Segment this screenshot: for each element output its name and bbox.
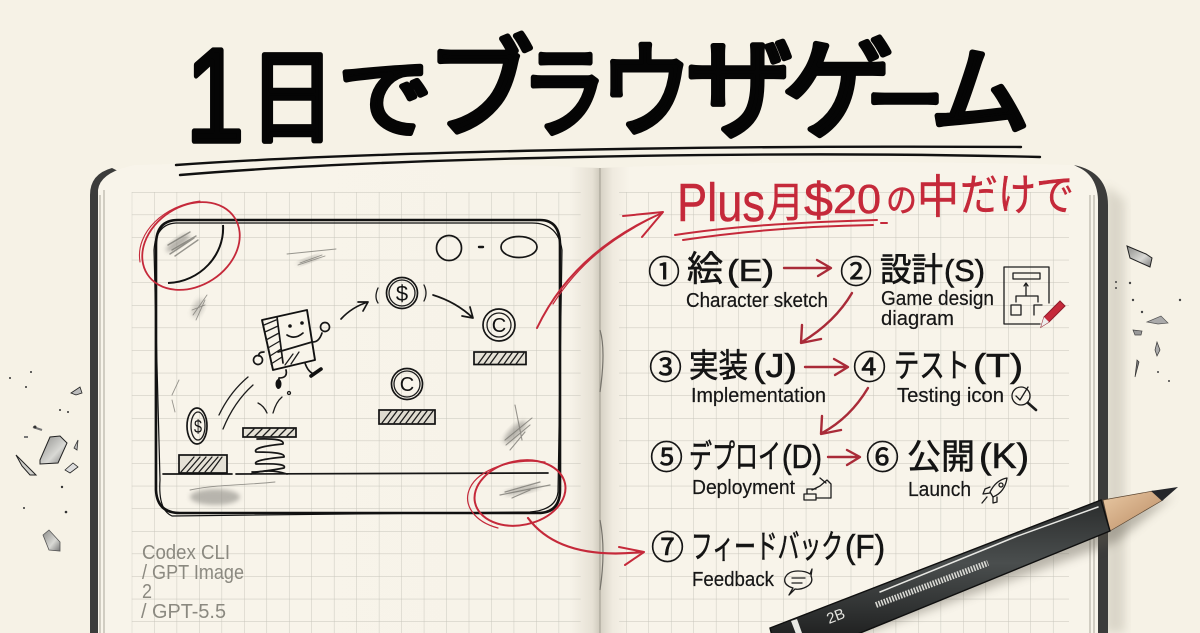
step 2: 設計 bbox=[880, 251, 943, 288]
step 6: 公開 bbox=[907, 438, 975, 477]
character bbox=[254, 310, 330, 389]
right grid bbox=[619, 192, 1069, 633]
model caption: / GPT Image bbox=[142, 562, 244, 584]
icon: rocket bbox=[982, 478, 1007, 503]
red heading: 月 bbox=[767, 179, 804, 226]
step 3 bbox=[649, 347, 826, 407]
pencil body bbox=[770, 500, 1110, 633]
step 3: (J) bbox=[753, 347, 797, 384]
model caption: / GPT-5.5 bbox=[141, 601, 226, 623]
top right controls bbox=[436, 236, 537, 260]
dollar coin top bbox=[376, 278, 426, 308]
pencil grade: 2B bbox=[824, 605, 848, 628]
notebook shadow bbox=[1105, 185, 1125, 633]
arrow 3 to 4 bbox=[805, 359, 848, 375]
pencil label bbox=[876, 563, 988, 605]
spring platform bbox=[243, 428, 296, 474]
red arrow to feedback bbox=[528, 518, 644, 565]
red heading: 中 bbox=[917, 171, 959, 223]
title: ブ bbox=[426, 29, 534, 152]
step 4 bbox=[853, 347, 1023, 407]
arrow 5 to 6 bbox=[828, 450, 860, 465]
dollar coin left with platform bbox=[179, 408, 227, 473]
title: 日 bbox=[249, 42, 335, 156]
step 3: Implementation bbox=[691, 385, 826, 407]
title bbox=[186, 22, 1030, 169]
dollar coin left with platform: $ bbox=[194, 417, 202, 437]
red heading bbox=[675, 171, 1074, 240]
step 2: (S) bbox=[944, 253, 985, 288]
arrow 4 to 5 bbox=[821, 388, 868, 434]
ground line bbox=[163, 473, 548, 474]
step 7: (F) bbox=[845, 528, 885, 565]
title double underline bbox=[176, 147, 1040, 175]
step 2: diagram bbox=[881, 308, 954, 330]
red heading: Plus bbox=[677, 173, 765, 233]
screen frame bbox=[154, 220, 562, 516]
step 4: テスト bbox=[894, 347, 970, 384]
model caption: 2 bbox=[142, 581, 152, 603]
pencil highlight bbox=[880, 507, 1098, 592]
icon: magnifier check bbox=[1012, 387, 1036, 410]
step 5: (D) bbox=[782, 438, 822, 475]
step 5: Deployment bbox=[692, 477, 795, 499]
title: で bbox=[338, 50, 432, 149]
pencil lead bbox=[1151, 487, 1178, 501]
C coin centre with platform: C bbox=[400, 374, 414, 396]
red heading: 20 bbox=[833, 176, 881, 222]
left grid bbox=[132, 192, 581, 633]
binding thread bbox=[600, 330, 603, 590]
step 4: ④ bbox=[853, 349, 886, 386]
step 2: Game design bbox=[881, 288, 994, 310]
C coin centre with platform bbox=[379, 368, 435, 424]
title: ー bbox=[866, 60, 944, 145]
left page bbox=[98, 162, 600, 633]
red arrow to heading bbox=[537, 212, 663, 328]
right cover edge bbox=[1074, 165, 1108, 633]
pencil band bbox=[791, 619, 802, 633]
inner corner arc bbox=[168, 225, 223, 283]
model caption: Codex CLI bbox=[142, 542, 230, 564]
step 7 bbox=[651, 528, 885, 591]
step 1: ① bbox=[648, 254, 680, 290]
title: ム bbox=[930, 40, 1030, 147]
red circle bottom right bbox=[468, 452, 572, 534]
icon: red pencil bbox=[1041, 301, 1065, 327]
step 7: ⑦ bbox=[651, 529, 684, 566]
right page bbox=[600, 162, 1098, 633]
model caption bbox=[141, 542, 244, 623]
title: ザ bbox=[686, 30, 794, 153]
pencil smudges bbox=[164, 232, 540, 505]
red heading: だけで bbox=[960, 171, 1074, 220]
step 3: ③ bbox=[649, 349, 682, 386]
title: ウ bbox=[600, 35, 692, 151]
debris right bbox=[1115, 246, 1181, 382]
step 7: フィードバック bbox=[691, 528, 843, 565]
spine fold bbox=[599, 168, 601, 633]
red heading: の bbox=[886, 182, 917, 220]
pencil shadow bbox=[790, 494, 1175, 633]
step 1: 絵 bbox=[687, 250, 723, 289]
red circle top left bbox=[126, 184, 256, 308]
step 5: ⑤ bbox=[650, 439, 683, 476]
icon: deployment bbox=[804, 478, 831, 500]
left cover edge bbox=[90, 168, 120, 633]
step 5 bbox=[650, 438, 822, 499]
step 6 bbox=[866, 437, 1029, 501]
step 7: Feedback bbox=[692, 569, 775, 591]
step 4: Testing icon bbox=[897, 385, 1004, 407]
step 4: (T) bbox=[973, 347, 1023, 384]
step 6: ⑥ bbox=[866, 439, 899, 476]
step 3: 実装 bbox=[689, 347, 748, 384]
title: 1 bbox=[186, 22, 244, 169]
game screen sketch bbox=[141, 220, 562, 623]
motion lines bbox=[219, 377, 290, 429]
step 1 bbox=[648, 250, 828, 312]
pencil bbox=[770, 487, 1178, 633]
step 1: (E) bbox=[727, 253, 774, 288]
jump arrows bbox=[341, 295, 473, 319]
notebook bbox=[90, 162, 1125, 633]
arrow 2 to 3 bbox=[801, 293, 852, 343]
step 2: ② bbox=[840, 254, 872, 290]
C coin right with platform: C bbox=[492, 315, 506, 337]
C coin right with platform bbox=[474, 309, 526, 364]
page stack edges bbox=[100, 190, 1094, 633]
step 1: Character sketch bbox=[686, 290, 828, 312]
arrow 1 to 2 bbox=[784, 260, 831, 276]
step 6: Launch bbox=[908, 479, 971, 501]
title: ゲ bbox=[782, 30, 894, 153]
step 5: デプロイ bbox=[689, 438, 781, 475]
icon: design diagram bbox=[1004, 267, 1049, 324]
red heading: $ bbox=[804, 174, 833, 227]
step 6: (K) bbox=[979, 437, 1029, 476]
dollar coin top: $ bbox=[396, 281, 408, 306]
pencil wood bbox=[1103, 491, 1163, 531]
icon: speech bubble bbox=[785, 569, 812, 595]
heading underline bbox=[675, 220, 887, 240]
debris left bbox=[9, 371, 82, 551]
title: ラ bbox=[521, 39, 607, 151]
step 2 bbox=[840, 251, 994, 330]
